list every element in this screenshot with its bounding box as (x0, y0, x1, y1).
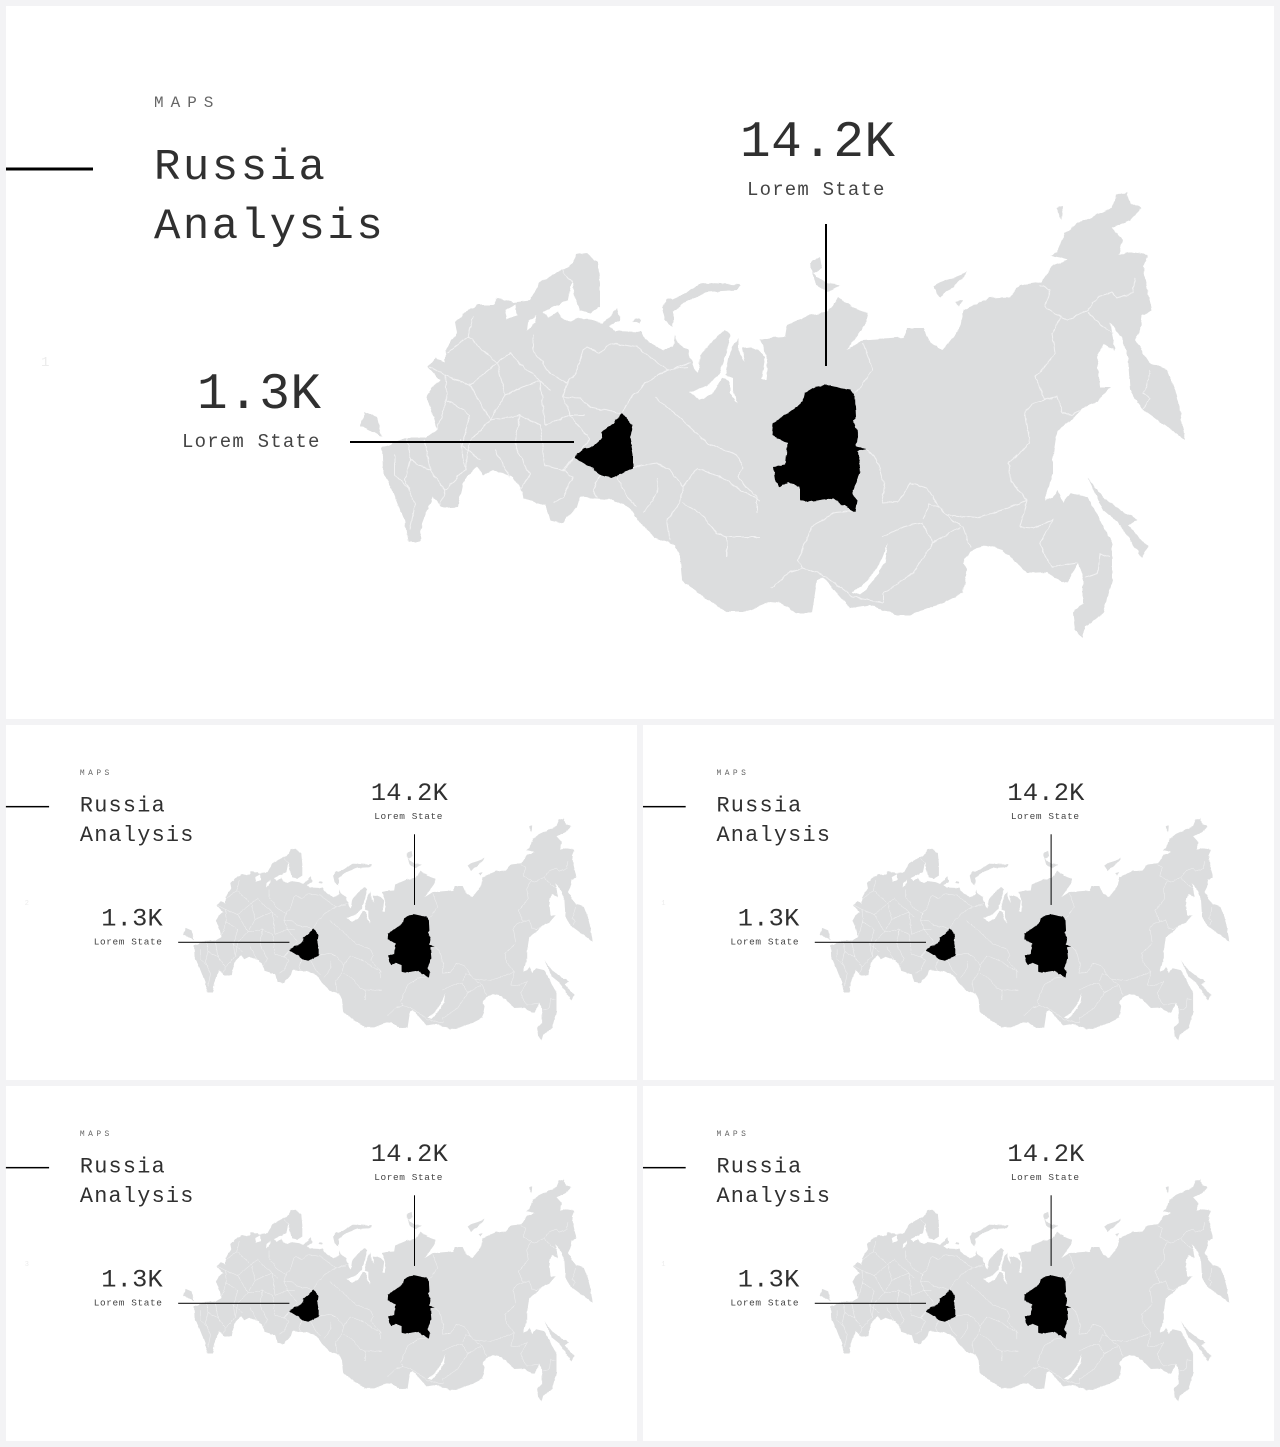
slide number: 1 (661, 900, 666, 908)
panel: variant top right (643, 725, 1274, 1080)
callout: 14.2K: Lorem State (1011, 811, 1080, 822)
title: Analysis (154, 202, 385, 252)
callout: 14.2K (1007, 1140, 1085, 1266)
heading marker line (643, 1167, 686, 1168)
panel: main slide (6, 6, 1274, 719)
callout: 14.2K (371, 1140, 449, 1266)
heading marker line (643, 806, 686, 807)
heading marker line (6, 1167, 49, 1168)
callout: 1.3K: Lorem State (182, 431, 321, 453)
callout: 14.2K: 14.2K (1007, 1140, 1085, 1169)
title: Russia (80, 1154, 166, 1179)
map: Russia with two highlighted regions (360, 192, 1185, 638)
callout: 1.3K: Lorem State (730, 1297, 799, 1308)
callout: 14.2K: 14.2K (740, 115, 896, 172)
callout: 14.2K: Lorem State (374, 1172, 443, 1183)
slide number: 3 (25, 1261, 29, 1269)
callout: 14.2K: Lorem State (747, 179, 886, 201)
eyebrow label: MAPS (716, 1130, 749, 1139)
map: Russia (820, 818, 1229, 1040)
callout: 14.2K (740, 115, 896, 366)
callout: 1.3K (182, 367, 574, 453)
heading marker line (6, 806, 49, 807)
callout: 1.3K (94, 904, 289, 947)
map: Russia (183, 818, 593, 1040)
title: Russia (80, 793, 166, 818)
heading marker line (6, 168, 93, 170)
callout: 1.3K (730, 904, 926, 947)
slide number: 1 (41, 355, 49, 371)
eyebrow label: MAPS (80, 769, 113, 778)
callout: 1.3K: Lorem State (94, 936, 163, 947)
slide number: 1 (661, 1261, 666, 1269)
title: Russia (154, 143, 327, 193)
callout: 14.2K (1007, 779, 1085, 905)
title: Analysis (80, 823, 195, 848)
callout: 14.2K: Lorem State (374, 811, 443, 822)
callout: 1.3K: 1.3K (738, 904, 800, 933)
callout: 14.2K: 14.2K (1007, 779, 1085, 808)
callout: 1.3K: 1.3K (101, 1265, 164, 1294)
callout: 1.3K: Lorem State (730, 936, 799, 947)
map: Russia (183, 1179, 593, 1401)
callout: 14.2K: Lorem State (1011, 1172, 1080, 1183)
callout: 1.3K: 1.3K (738, 1265, 800, 1294)
map: Russia (820, 1179, 1229, 1401)
eyebrow label: MAPS (154, 94, 220, 112)
callout: 14.2K: 14.2K (371, 1140, 449, 1169)
title: Russia (716, 1154, 803, 1179)
eyebrow label: MAPS (80, 1130, 113, 1139)
callout: 1.3K: 1.3K (101, 904, 164, 933)
panel: variant top left (6, 725, 637, 1080)
panel: variant bottom left (6, 1086, 637, 1441)
callout: 14.2K: 14.2K (371, 779, 449, 808)
callout: 1.3K (94, 1265, 289, 1308)
eyebrow label: MAPS (716, 769, 749, 778)
callout: 1.3K (730, 1265, 926, 1308)
callout: 1.3K: Lorem State (94, 1297, 163, 1308)
slide number: 2 (25, 900, 29, 908)
title: Analysis (716, 823, 831, 848)
callout: 1.3K: 1.3K (197, 367, 321, 424)
callout: 14.2K (371, 779, 449, 905)
panel: variant bottom right (643, 1086, 1274, 1441)
title: Analysis (716, 1184, 831, 1209)
title: Analysis (80, 1184, 195, 1209)
title: Russia (716, 793, 803, 818)
